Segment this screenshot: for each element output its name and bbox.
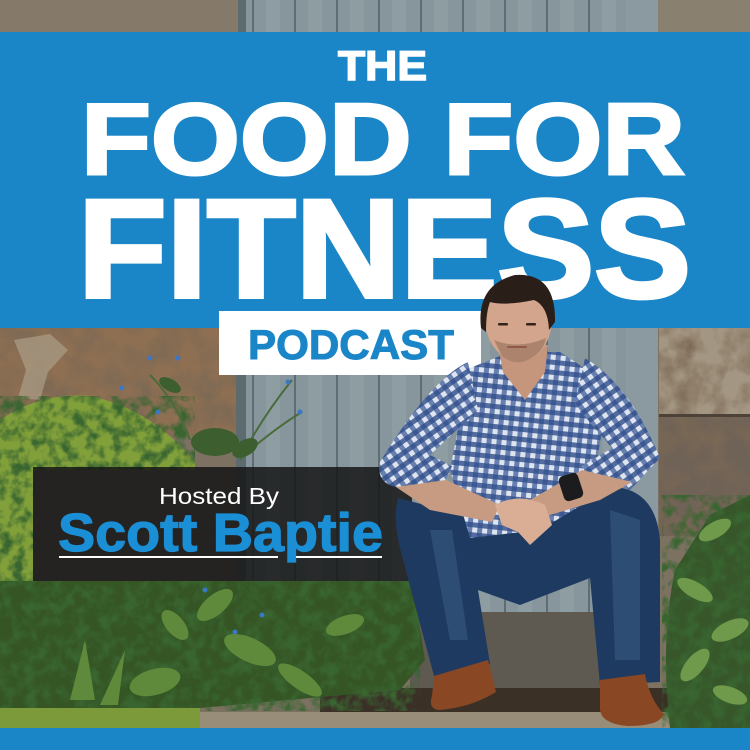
stubble: [494, 338, 546, 362]
stone wall left: [0, 0, 238, 438]
head: [484, 278, 553, 362]
title: FOOD FOR: [81, 84, 685, 196]
hair: [480, 275, 555, 332]
hands: [495, 498, 552, 545]
left sleeve: [379, 362, 478, 494]
title: THE: [338, 42, 427, 89]
shirt body: [450, 352, 610, 538]
man sitting: [379, 275, 664, 726]
bush left: [0, 396, 195, 600]
plant right: [662, 495, 750, 728]
bottom blue strip: [0, 728, 750, 750]
door: [236, 0, 658, 620]
flowers on door and wall: [120, 356, 302, 634]
shoes: [431, 660, 664, 726]
neck: [498, 345, 548, 400]
host box: Scott Baptie: [58, 503, 383, 563]
eyes and mouth: [498, 323, 536, 348]
right sleeve: [575, 358, 660, 490]
plants below host box: [0, 581, 425, 728]
leaves foreground: [70, 583, 367, 705]
watch: [557, 472, 585, 502]
jeans: [396, 488, 660, 685]
stone step: [410, 612, 615, 692]
host box: Hosted By: [159, 483, 280, 509]
host box: [33, 467, 412, 581]
title: FITNESS: [78, 170, 691, 327]
forearms: [396, 470, 632, 522]
title: [78, 42, 691, 327]
stone wall right: [658, 0, 750, 538]
ground path: [195, 688, 670, 730]
top blue band: [0, 32, 750, 328]
podcast label: [219, 311, 481, 375]
podcast label: PODCAST: [248, 321, 454, 368]
